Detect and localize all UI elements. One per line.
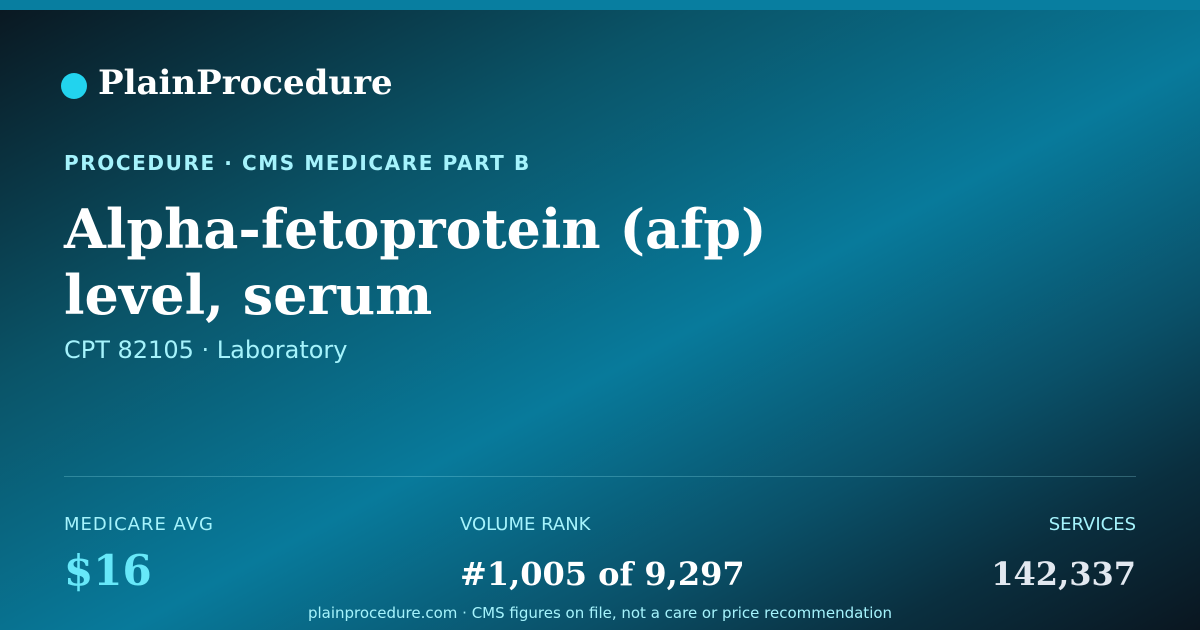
logo xyxy=(61,63,393,103)
brand name: PlainProcedure xyxy=(98,63,393,103)
stat: services xyxy=(991,514,1136,593)
footer note: plainprocedure.com · CMS figures on file, not a care or price recommendation xyxy=(308,604,892,622)
stat value: $16 xyxy=(64,546,152,595)
divider xyxy=(64,476,1136,477)
stat: medicare average xyxy=(64,514,214,595)
top accent bar xyxy=(0,0,1200,10)
eyebrow: PROCEDURE · CMS MEDICARE PART B xyxy=(64,151,531,175)
title: Alpha-fetoprotein (afp) xyxy=(64,197,767,261)
stat: volume rank xyxy=(460,514,745,593)
stat value: 142,337 xyxy=(991,555,1136,593)
stat label: VOLUME RANK xyxy=(460,514,590,535)
stat label: SERVICES xyxy=(1049,514,1136,535)
stat value: #1,005 of 9,297 xyxy=(460,555,745,593)
title xyxy=(64,197,767,327)
stat label: MEDICARE AVG xyxy=(64,514,214,535)
title: level, serum xyxy=(64,263,432,327)
icon: brand dot xyxy=(61,73,87,99)
subtitle: CPT 82105 · Laboratory xyxy=(64,336,348,364)
